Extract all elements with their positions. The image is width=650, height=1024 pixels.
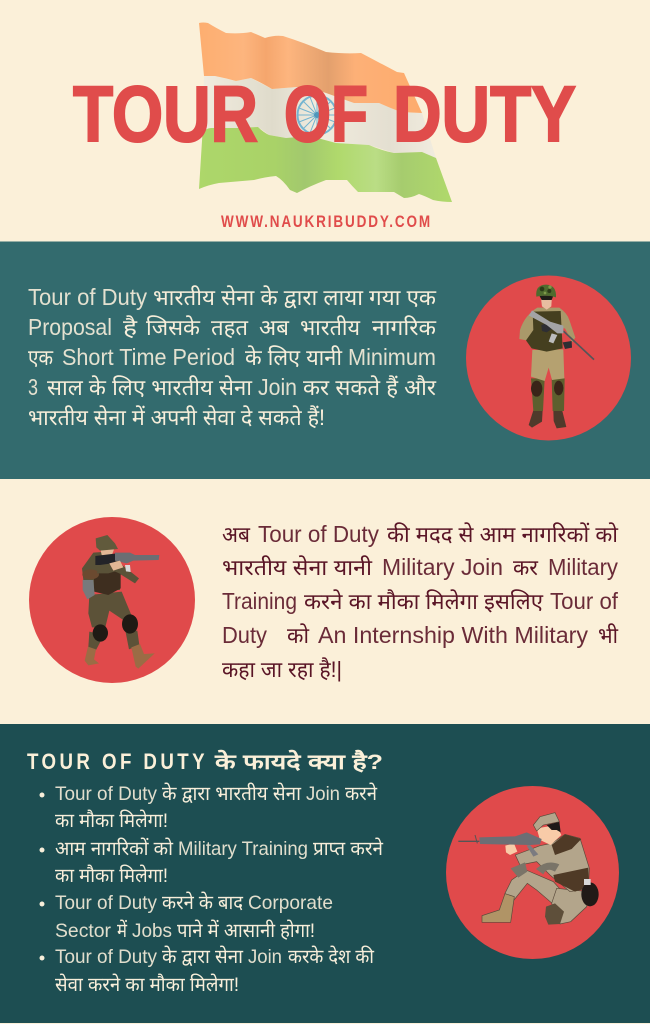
list item 3: Jobs [132,920,172,942]
benefits heading: के फायदे क्या है? [214,749,383,774]
intro text block: के लिए यानी [245,345,342,370]
intro text block: नागरिक [372,315,437,340]
intro text block: Minimum [348,344,436,370]
list item 4 [40,945,375,996]
title: DUTY [393,69,576,158]
intro text block: Short Time Period [62,344,235,370]
internship text block: करने का मौका मिलेगा इसलिए [304,589,544,614]
benefits heading [27,749,383,774]
list item 1: के द्वारा भारतीय सेना [162,782,302,805]
intro text block: एक [28,345,54,370]
title: OF [284,69,368,158]
panel: what is Tour of Duty [0,242,650,479]
list item 2: Military Training [178,838,308,860]
intro text block: है [123,315,137,340]
list item 1: Tour of Duty [55,783,157,805]
intro text block: भारतीय सेना में अपनी सेवा दे सकते हैं! [28,405,325,430]
icon: waving Indian flag [199,22,452,202]
icon: Ashoka chakra [298,96,336,134]
benefits list [40,782,384,996]
list item 2: का मौका मिलेगा! [55,864,168,887]
internship text block: Military Join [382,554,503,580]
list item 3: करने के बाद [162,891,244,914]
list item 3: Sector [55,920,112,942]
internship text block: Duty [222,622,267,648]
panel: benefits [0,724,650,1023]
internship text block: कर [513,555,539,580]
intro text block [28,284,437,430]
internship text block: An Internship With Military [318,622,589,648]
intro text block: भारतीय सेना के द्वारा लाया गया एक [153,285,437,310]
internship text block: Tour of [550,588,619,614]
internship text block: कहा जा रहा है!| [222,657,342,682]
list item 4: के द्वारा सेना [162,945,244,968]
list item 4: करके देश की [288,945,375,968]
list item 2 [40,837,384,887]
list item 4: सेवा करने का मौका मिलेगा! [55,973,239,996]
list item 1 [40,782,378,832]
list item 3 [40,891,333,942]
intro text block: कर सकते हैं और [303,375,437,400]
intro text block: Join [258,374,297,400]
internship text block: को [287,623,309,648]
title [73,69,576,158]
internship text block: भी [598,623,618,648]
header panel [73,22,576,231]
icon: walking soldier aiming rifle in red circle [29,517,195,683]
internship text block: की मदद से आम नागरिकों को [387,522,618,547]
list item 3: Tour of Duty [55,892,157,914]
list item 1: करने [345,782,378,805]
intro text block: Proposal [28,314,112,340]
internship text block: Military [548,554,618,580]
intro text block: Tour of Duty [28,284,147,310]
intro text block: भारतीय [300,315,361,340]
internship text block: Tour of Duty [258,521,379,547]
internship text block: भारतीय सेना यानी [222,555,372,580]
intro text block: जिसके [146,315,201,340]
intro text block: 3 [28,374,38,400]
icon: kneeling soldier aiming rifle in red circle [446,786,619,959]
website url: WWW.NAUKRIBUDDY.COM [221,213,430,231]
internship text block: Training [222,588,297,614]
panel: internship with military [0,479,650,724]
internship text block [222,521,619,682]
intro text block: तहत [211,315,248,340]
list item 2: प्राप्त करने [313,837,384,860]
intro text block: अब [259,315,289,340]
list item 3: में [117,919,127,942]
benefits heading: TOUR OF DUTY [27,751,205,774]
list item 3: पाने में आसानी होगा! [177,919,315,942]
list item 2: आम नागरिकों को [55,837,174,860]
internship text block: अब [222,522,250,547]
list item 1: का मौका मिलेगा! [55,809,168,832]
list item 4: Join [248,946,282,968]
list item 3: Corporate [248,892,333,914]
list item 1: Join [306,783,340,805]
icon: standing soldier in red circle [466,276,631,440]
list item 4: Tour of Duty [55,946,157,968]
title: TOUR [73,69,258,158]
intro text block: साल के लिए भारतीय सेना [47,375,252,400]
